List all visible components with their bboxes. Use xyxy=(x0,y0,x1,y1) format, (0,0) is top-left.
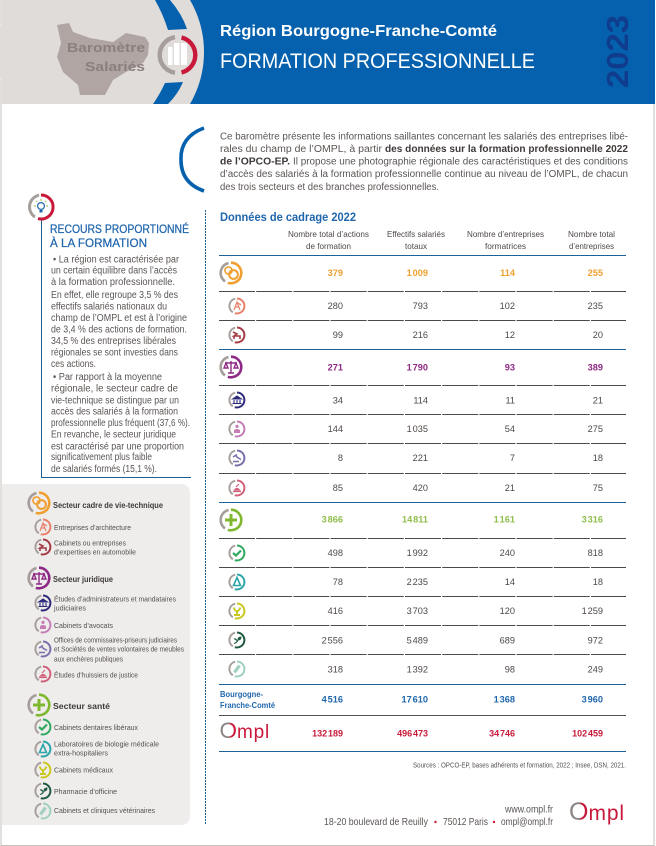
table column headers: d’entreprises xyxy=(569,241,614,251)
row: laboratoires: 18 xyxy=(593,577,603,587)
footer contact xyxy=(324,804,553,828)
row: secteur cadre de vie-technique xyxy=(221,263,603,283)
row: administrateurs: 21 xyxy=(593,396,603,406)
intro text: Ce baromètre présente les informations saillantes concernant les salariés des entreprises libé- xyxy=(220,132,628,142)
row: commissaires-priseurs: 18 xyxy=(593,453,603,463)
title: region: Région Bourgogne-Franche-Comté xyxy=(220,23,497,40)
row: avocats xyxy=(229,422,603,436)
legend: cabinets dentaires xyxy=(35,720,138,734)
row: secteur santé xyxy=(221,510,603,530)
table column headers: Nombre d’entreprises xyxy=(467,229,544,239)
barometer label: Salariés xyxy=(85,59,145,74)
row: secteur juridique: 1 790 xyxy=(407,362,428,372)
row: OMPL total: 34 746 xyxy=(489,728,515,738)
legend: secteur juridique xyxy=(29,568,113,588)
legend: secteur santé: Secteur santé xyxy=(53,701,110,711)
panel: legend xyxy=(2,484,190,825)
intro text: des trois secteurs et des branches professionnelles. xyxy=(220,182,439,193)
row: OMPL total: 102 459 xyxy=(572,728,603,738)
row: architecture: 102 xyxy=(500,301,515,311)
row: commissaires-priseurs xyxy=(229,450,603,465)
row: secteur juridique: 93 xyxy=(505,362,515,372)
legend: administrateurs et mandataires xyxy=(35,594,176,612)
legend: expertises en automobile: Cabinets ou entreprises xyxy=(54,538,126,548)
row: laboratoires xyxy=(229,574,603,589)
intro text: de l’OPCO-EP. xyxy=(220,156,290,168)
row: secteur cadre de vie-technique: 379 xyxy=(328,268,343,278)
footer contact: ompl@ompl.fr xyxy=(501,816,553,828)
footer logo: Ompl xyxy=(569,798,625,826)
row: pharmacie: 689 xyxy=(500,636,515,646)
row: laboratoires: 14 xyxy=(505,577,515,587)
body text: champ de l’OMPL et est à l’origine xyxy=(51,313,187,324)
row: secteur santé: 1 161 xyxy=(494,514,515,524)
legend: entreprises d'architecture xyxy=(35,520,131,534)
row: secteur juridique xyxy=(221,357,603,377)
row: dentaires: 240 xyxy=(500,548,515,558)
row: Bourgogne-Franche-Comté total: 17 610 xyxy=(401,694,428,704)
row: secteur juridique: 271 xyxy=(328,362,343,372)
row: laboratoires: 78 xyxy=(333,577,343,587)
row: secteur santé: 14 811 xyxy=(402,514,428,524)
intro text: Il propose une photographie régionale des caractéristiques et des conditions xyxy=(293,156,628,168)
row: administrateurs: 114 xyxy=(413,396,428,406)
legend: cabinets d'avocats: Cabinets d’avocats xyxy=(54,621,113,630)
row: pharmacie: 2 556 xyxy=(322,636,343,646)
row: huissiers xyxy=(229,480,603,495)
body text: ces actions. xyxy=(51,359,96,370)
table column headers: Effectifs salariés xyxy=(387,229,445,239)
row: médicaux: 416 xyxy=(328,606,343,616)
legend: commissaires-priseurs xyxy=(35,636,184,664)
icon: light bulb xyxy=(30,195,53,219)
table column headers: formatrices xyxy=(485,241,526,251)
dotted column separator xyxy=(204,210,206,825)
row: Bourgogne-Franche-Comté total: Franche-Comté xyxy=(220,700,275,710)
row: médicaux: 3 703 xyxy=(407,606,428,616)
row: médicaux: 120 xyxy=(500,606,515,616)
table column headers: de formation xyxy=(306,241,351,251)
body text: à la formation professionnelle. xyxy=(51,277,175,288)
row: Bourgogne-Franche-Comté total: 3 960 xyxy=(582,694,603,704)
row: Bourgogne-Franche-Comté total: Bourgogne- xyxy=(220,689,263,699)
legend: cabinets dentaires: Cabinets dentaires libéraux xyxy=(54,723,138,732)
legend: cabinets d'avocats xyxy=(35,618,113,632)
legend: secteur juridique: Secteur juridique xyxy=(53,574,113,584)
body text: professionnelle plus fréquent (37,6 %). xyxy=(51,418,190,429)
legend: huissiers de justice: Études d’huissiers de justice xyxy=(54,670,138,680)
row: dentaires: 818 xyxy=(588,548,603,558)
legend: administrateurs et mandataires: Études d’administrateurs et mandataires xyxy=(54,594,176,604)
row: OMPL total: Ompl xyxy=(220,718,270,743)
footer contact: 18-20 boulevard de Reuilly xyxy=(324,816,429,828)
row: administrateurs xyxy=(229,392,603,407)
title: formation professionnelle: FORMATION PROFESSIONNELLE xyxy=(220,50,535,73)
row: secteur santé: 3 866 xyxy=(322,514,343,524)
row: automobile: 12 xyxy=(505,330,515,340)
row: commissaires-priseurs: 8 xyxy=(338,453,343,463)
row: architecture xyxy=(229,298,603,313)
legend: administrateurs et mandataires: judiciaires xyxy=(53,604,86,612)
body text: • La région est caractérisée par xyxy=(53,254,180,266)
footer contact: 75012 Paris xyxy=(443,816,488,828)
legend: laboratoires xyxy=(35,740,159,758)
row: architecture: 280 xyxy=(328,301,343,311)
row: automobile xyxy=(229,328,603,342)
table column headers: Nombre total d’actions xyxy=(288,229,369,239)
row: architecture: 793 xyxy=(413,301,428,311)
legend: secteur santé xyxy=(29,695,110,715)
row: secteur cadre de vie-technique: 114 xyxy=(500,268,516,278)
row: huissiers: 420 xyxy=(413,483,428,493)
body text xyxy=(51,254,190,475)
body text: un certain équilibre dans l’accès xyxy=(51,266,177,276)
table rules xyxy=(219,256,626,752)
row: commissaires-priseurs: 221 xyxy=(413,453,428,463)
row: huissiers: 75 xyxy=(593,483,603,493)
panel frame xyxy=(42,219,191,478)
row: avocats: 1 035 xyxy=(407,424,428,434)
intro text xyxy=(220,132,628,193)
heading xyxy=(50,221,189,250)
legend: pharmacie: Pharmacie d’officine xyxy=(54,787,117,796)
body text: de salariés formés (15,1 %). xyxy=(51,464,157,475)
row: Bourgogne-Franche-Comté total xyxy=(220,689,603,710)
panel: recours à la formation xyxy=(30,195,191,478)
body text: • Par rapport à la moyenne xyxy=(53,372,162,383)
row: vétérinaires: 1 392 xyxy=(407,664,428,674)
row: dentaires: 498 xyxy=(328,548,343,558)
body text: accès des salariés à la formation xyxy=(51,406,178,418)
body text: 34,5 % des entreprises libérales xyxy=(51,336,176,347)
intro text: des données sur la formation professionnelle 2022 xyxy=(385,144,628,155)
legend: expertises en automobile xyxy=(35,538,136,556)
legend: entreprises d'architecture: Entreprises d’architecture xyxy=(54,523,131,532)
legend: huissiers de justice xyxy=(35,666,138,681)
row: vétérinaires: 318 xyxy=(328,664,343,674)
legend: vétérinaires: Cabinets et cliniques vétérinaires xyxy=(54,806,155,815)
legend: secteur cadre de vie-technique: Secteur cadre de vie-technique xyxy=(53,500,163,510)
barometer logo ring xyxy=(160,37,195,73)
row: vétérinaires: 249 xyxy=(588,664,603,674)
header banner xyxy=(0,0,655,104)
body text: de 3,4 % des actions de formation. xyxy=(51,324,187,336)
table heading: Données de cadrage 2022 xyxy=(220,210,356,224)
legend: laboratoires: Laboratoires de biologie médicale xyxy=(54,740,159,748)
row: OMPL total xyxy=(220,718,603,743)
row: secteur santé: 3 316 xyxy=(582,514,603,524)
row: secteur juridique: 389 xyxy=(588,362,603,372)
row: administrateurs: 11 xyxy=(505,396,515,406)
row: Bourgogne-Franche-Comté total: 4 516 xyxy=(322,694,343,704)
row: commissaires-priseurs: 7 xyxy=(510,453,515,463)
year 2023: 2023 xyxy=(600,15,635,88)
row: dentaires: 1 992 xyxy=(407,548,428,558)
row: médicaux xyxy=(229,604,603,618)
row: Bourgogne-Franche-Comté total: 1 368 xyxy=(494,694,515,704)
row: OMPL total: 132 189 xyxy=(312,728,343,738)
row: avocats: 54 xyxy=(505,424,515,434)
table column headers xyxy=(288,229,615,251)
body text: régionales se sont investies dans xyxy=(51,348,178,358)
heading: RECOURS PROPORTIONNÉ xyxy=(50,221,189,236)
intro text: rales du champ de l’OMPL, à partir xyxy=(220,144,383,155)
body text: En revanche, le secteur juridique xyxy=(51,430,176,440)
legend: commissaires-priseurs: et Sociétés de ventes volontaires de meubles xyxy=(54,644,184,654)
body text: En effet, elle regroupe 3,5 % des xyxy=(51,290,178,301)
row: vétérinaires: 98 xyxy=(505,664,515,674)
table column headers: Nombre total xyxy=(568,229,615,239)
legend background xyxy=(2,484,190,825)
row: avocats: 144 xyxy=(328,424,343,434)
legend: secteur cadre de vie-technique xyxy=(29,493,163,513)
row: administrateurs: 34 xyxy=(333,396,343,406)
legend: pharmacie xyxy=(35,784,117,798)
footer contact: www.ompl.fr xyxy=(504,804,553,816)
body text: significativement plus faible xyxy=(51,452,152,463)
row: huissiers: 85 xyxy=(333,483,343,493)
legend: expertises en automobile: d’expertises en automobile xyxy=(54,548,136,556)
sources: Sources : OPCO-EP, bases adhérents et formation, 2022 ; Insee, DSN, 2021. xyxy=(413,762,626,770)
row: avocats: 275 xyxy=(588,424,603,434)
icon: region map xyxy=(57,23,149,95)
body text: effectifs salariés nationaux du xyxy=(51,302,167,312)
row: automobile: 216 xyxy=(413,330,428,340)
legend: cabinets médicaux: Cabinets médicaux xyxy=(54,766,113,774)
row: dentaires xyxy=(229,546,603,560)
row: secteur cadre de vie-technique: 255 xyxy=(588,268,603,278)
legend: vétérinaires xyxy=(35,804,155,818)
row: huissiers: 21 xyxy=(505,483,515,493)
row: pharmacie xyxy=(229,632,603,647)
row: pharmacie: 5 489 xyxy=(407,636,428,646)
body text: est caractérisé par une proportion xyxy=(51,442,184,452)
row: architecture: 235 xyxy=(588,301,603,311)
legend: cabinets médicaux xyxy=(35,762,113,777)
legend: commissaires-priseurs: aux enchères publiques xyxy=(54,654,123,664)
row: vétérinaires xyxy=(229,662,603,676)
row: automobile: 20 xyxy=(593,330,603,340)
intro bracket xyxy=(181,128,204,191)
row: pharmacie: 972 xyxy=(588,636,603,646)
legend: commissaires-priseurs: Offices de commissaires-priseurs judiciaires xyxy=(54,636,177,644)
body text: régionale, le secteur cadre de xyxy=(51,384,178,394)
intro text: d’accès des salariés à la formation professionnelle continue au niveau de l’OMPL, de chacun xyxy=(220,169,628,180)
heading: À LA FORMATION xyxy=(50,235,147,250)
barometer label: Baromètre xyxy=(67,40,145,55)
body text: vie-technique se distingue par un xyxy=(51,396,179,406)
row: automobile: 99 xyxy=(333,330,343,340)
row: OMPL total: 496 473 xyxy=(397,728,428,738)
row: secteur cadre de vie-technique: 1 009 xyxy=(407,268,428,278)
barometer label xyxy=(67,40,145,74)
legend: laboratoires: extra-hospitaliers xyxy=(54,748,108,758)
row: médicaux: 1 259 xyxy=(582,606,603,616)
table column headers: totaux xyxy=(405,241,428,251)
row: laboratoires: 2 235 xyxy=(407,577,428,587)
